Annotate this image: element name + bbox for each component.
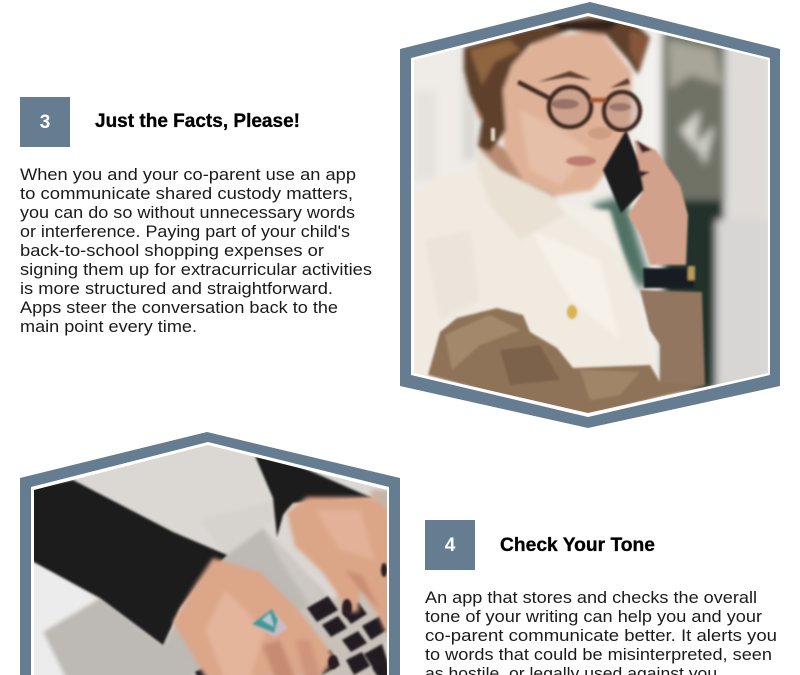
hair: [464, 16, 650, 152]
body text step 4: [425, 588, 777, 675]
body text step 3: main point every time.: [20, 317, 197, 336]
left sleeve: [30, 480, 227, 645]
hexagon frame 4: [20, 432, 400, 675]
left hand: [173, 558, 335, 675]
pendant: [567, 305, 577, 319]
body text step 4: co-parent communicate better. It alerts you: [425, 626, 777, 645]
panel: step 4 photo of hands on laptop: [20, 432, 400, 675]
body text step 3: or interference. Paying part of your child's: [20, 222, 350, 241]
face: [498, 30, 632, 196]
panel: step 3 photo of woman on phone: [400, 2, 780, 428]
panel: step 4 text: [425, 520, 777, 675]
cardigan: [428, 308, 705, 415]
earring: [491, 128, 495, 141]
glasses: [518, 82, 640, 130]
phone: [603, 130, 644, 213]
ring: [252, 609, 288, 637]
body text step 4: An app that stores and checks the overall: [425, 588, 757, 607]
cuff and sleeve: [640, 290, 705, 392]
body text step 3: signing them up for extracurricular activities: [20, 260, 372, 279]
body text step 3: back-to-school shopping expenses or: [20, 241, 324, 260]
body text step 3: you can do so without unnecessary words: [20, 203, 355, 222]
body text step 3: Apps steer the conversation back to the: [20, 298, 338, 317]
number badge 4: [425, 520, 475, 570]
heading: Just the Facts, Please!: Just the Facts, Please!: [95, 111, 300, 132]
right sleeve: [255, 456, 372, 537]
body text step 4: to words that could be misinterpreted, seen: [425, 645, 772, 664]
panel: step 3 text: [20, 97, 372, 336]
hand: [628, 140, 688, 265]
number badge 4: 4: [445, 535, 456, 556]
sweater body: [417, 172, 635, 380]
body text step 3: When you and your co-parent use an app: [20, 165, 356, 184]
lips and nose shade: [566, 156, 596, 166]
eyes: [551, 99, 579, 109]
number badge 3: [20, 97, 70, 147]
body text step 3: [20, 165, 372, 336]
photo: hands typing on laptop: [30, 440, 390, 675]
nails: [328, 563, 387, 669]
neck: [480, 140, 560, 197]
keyboard keys: [195, 596, 390, 675]
hexagon frame 3: [400, 2, 780, 428]
heading: Check Your Tone: Check Your Tone: [500, 535, 655, 556]
body text step 3: to communicate shared custody matters,: [20, 184, 353, 203]
eyebrows: [538, 71, 592, 82]
laptop: [43, 528, 327, 675]
photo: woman on phone: [410, 10, 775, 420]
watch: [643, 268, 694, 288]
number badge 3: 3: [40, 112, 50, 133]
right hand: [287, 497, 390, 642]
body text step 4: tone of your writing can help you and your: [425, 607, 762, 626]
body text step 3: is more structured and straightforward.: [20, 279, 333, 298]
